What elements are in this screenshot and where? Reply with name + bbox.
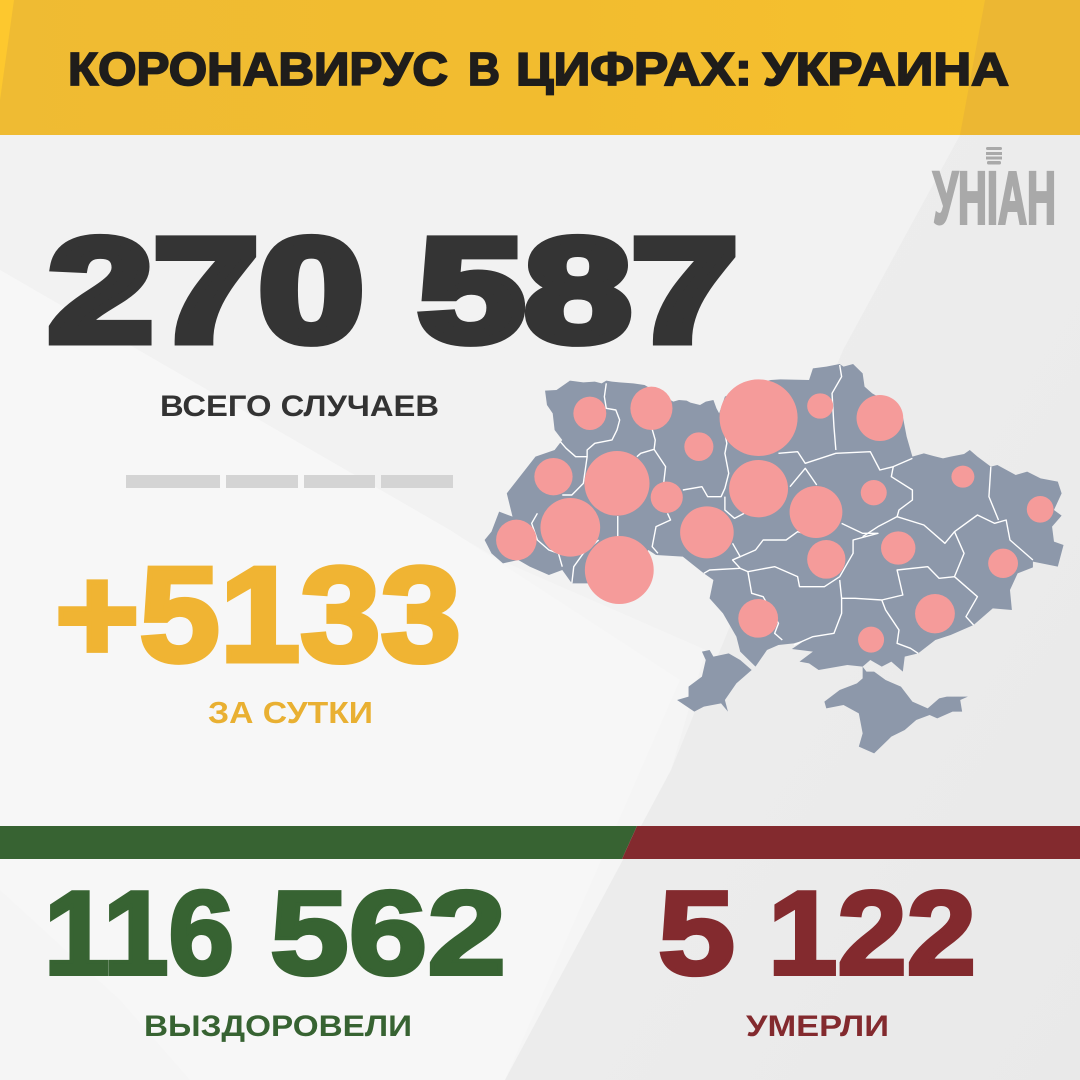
header band: [0, 0, 1080, 135]
Crimea: [824, 667, 968, 753]
green bar: [0, 826, 637, 859]
case circles: [496, 379, 1054, 653]
mainland: [485, 364, 1064, 672]
region borders: [532, 365, 1033, 653]
icon: microphone: [986, 147, 1002, 164]
total cases label: ВСЕГО СЛУЧАЕВ: [160, 390, 439, 423]
daily increase number: +5133: [55, 539, 461, 690]
daily increase label: ЗА СУТКИ: [208, 695, 373, 730]
recovered label: ВЫЗДОРОВЕЛИ: [144, 1010, 412, 1043]
western peninsula: [677, 650, 752, 712]
recovered number: 562: [270, 867, 506, 1000]
title: УКРАИНА: [763, 43, 1009, 95]
logo: УНІАН: [933, 147, 1056, 240]
deaths number: [658, 867, 976, 1000]
title: ЦИФРАХ:: [516, 43, 752, 95]
total cases number: [48, 209, 738, 373]
deaths number: 5: [658, 867, 735, 1000]
title: КОРОНАВИРУС: [68, 43, 448, 95]
deaths label: УМЕРЛИ: [746, 1010, 889, 1043]
divider bars: [126, 475, 453, 488]
title: В: [468, 43, 500, 95]
total cases number: 587: [418, 209, 738, 373]
recovered number: [44, 867, 506, 1000]
recovered number: 116: [44, 867, 234, 1000]
deaths number: 122: [768, 867, 976, 1000]
total cases number: 270: [48, 209, 364, 373]
map of Ukraine with case circles: [485, 364, 1064, 753]
title: [68, 43, 1009, 95]
red bar: [622, 826, 1080, 859]
